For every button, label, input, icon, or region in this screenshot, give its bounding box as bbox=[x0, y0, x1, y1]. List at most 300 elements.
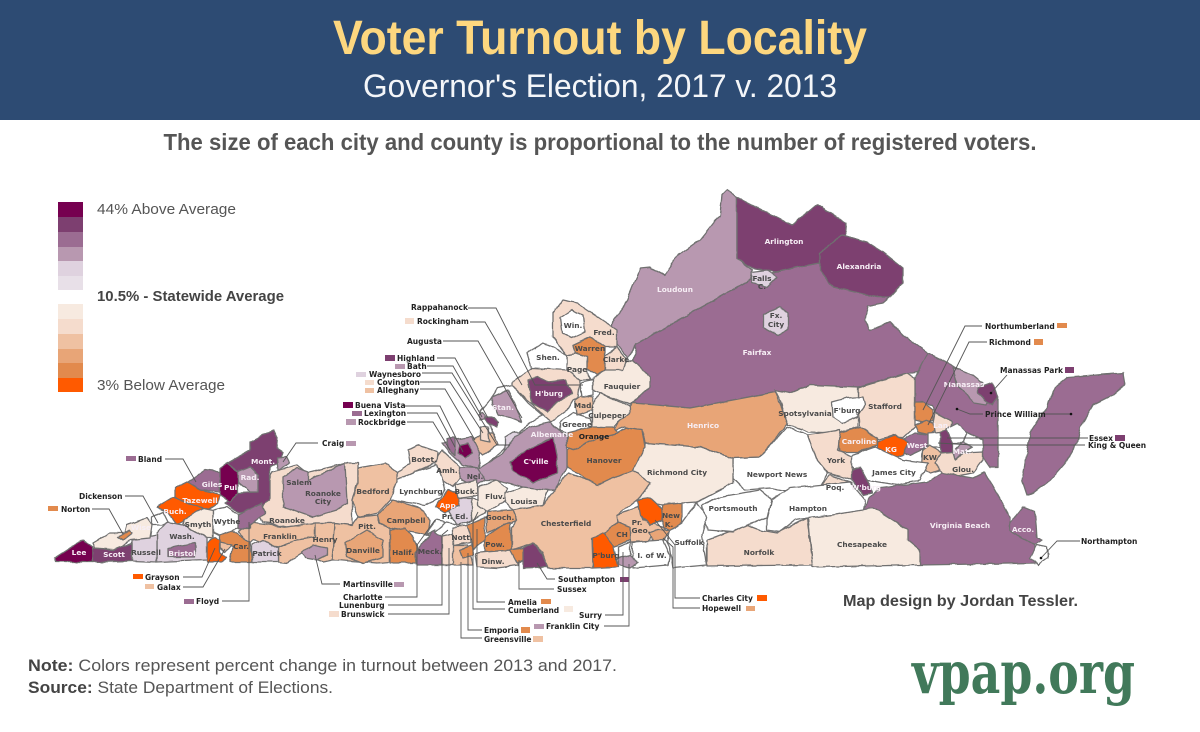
map: on-shape place labels: KW bbox=[923, 453, 937, 462]
county: Henry bbox=[278, 523, 335, 563]
map: on-shape place labels: I. of W. bbox=[637, 551, 667, 560]
callout: King & Queen: King & Queen bbox=[1088, 441, 1146, 450]
county: Dinwiddie bbox=[475, 550, 518, 568]
map: on-shape place labels: James City bbox=[871, 468, 916, 477]
map: on-shape place labels: H'burg bbox=[535, 389, 563, 398]
county: Wise bbox=[93, 518, 152, 550]
county: Middlesex bbox=[945, 423, 967, 443]
map: on-shape place labels: W'burg bbox=[851, 483, 881, 492]
county: Alexandria bbox=[820, 235, 903, 297]
map: on-shape place labels: City bbox=[315, 497, 331, 506]
county: Franklin bbox=[238, 522, 315, 547]
county: Mathews bbox=[953, 442, 973, 460]
map: on-shape place labels: Salem bbox=[286, 478, 312, 487]
county: Nottoway bbox=[453, 525, 472, 545]
callout: Greensville bbox=[461, 562, 543, 644]
map: on-shape place labels: Botet. bbox=[411, 455, 437, 464]
callout: Alleghany: Alleghany bbox=[377, 386, 419, 395]
map: on-shape place labels: Gooch. bbox=[486, 513, 515, 522]
callout: Floyd bbox=[184, 522, 249, 606]
county: Giles bbox=[188, 470, 220, 492]
callout: Norton: Norton bbox=[61, 505, 90, 514]
map: on-shape place labels: Lynchburg bbox=[399, 487, 443, 496]
header banner bbox=[0, 0, 1200, 120]
map: on-shape place labels: Geo. bbox=[632, 526, 651, 535]
county: Colonial Heights bbox=[605, 522, 630, 547]
map: on-shape place labels: Roanoke bbox=[269, 516, 305, 525]
map: on-shape place labels: Fx. bbox=[770, 311, 783, 320]
callout: Essex bbox=[947, 434, 1125, 443]
county: York bbox=[808, 430, 852, 480]
map: on-shape place labels: Henry bbox=[313, 535, 338, 544]
county: Louisa bbox=[505, 487, 548, 510]
county: James City bbox=[852, 447, 928, 485]
callout: Brunswick: Brunswick bbox=[341, 610, 386, 619]
county: Clarke bbox=[603, 347, 627, 370]
callout: Charlotte: Charlotte bbox=[343, 593, 383, 602]
map: callouts and leader lines bbox=[48, 303, 1146, 644]
map: on-shape place labels: Clarke bbox=[603, 355, 629, 364]
county: Virginia Beach bbox=[863, 472, 1037, 565]
callout: Sussex: Sussex bbox=[557, 585, 587, 594]
map: on-shape place labels: Danville bbox=[346, 546, 380, 555]
county: Augusta bbox=[478, 385, 542, 470]
callout: Bland: Bland bbox=[138, 455, 162, 464]
county: Russell bbox=[132, 535, 157, 562]
county: Rappahannock bbox=[580, 380, 593, 397]
county: Accomack bbox=[1010, 507, 1042, 545]
callout: Galax bbox=[145, 549, 225, 592]
county: Williamsburg bbox=[852, 467, 872, 495]
county: Rockingham bbox=[512, 368, 580, 422]
callout: Charles City: Charles City bbox=[702, 594, 753, 603]
callout: Southampton bbox=[537, 563, 629, 584]
map: on-shape place labels: Chesterfield bbox=[541, 519, 591, 528]
county: Prince George bbox=[617, 507, 667, 542]
map: on-shape place labels: Mat. bbox=[953, 447, 972, 456]
callout: Prince William bbox=[956, 408, 1072, 419]
callout: Lexington: Lexington bbox=[364, 409, 406, 418]
map: on-shape place labels: Pitt. bbox=[358, 522, 376, 531]
county: Carroll bbox=[220, 530, 252, 562]
map: on-shape place labels: F'burg bbox=[834, 406, 860, 415]
county: Cumberland bbox=[467, 497, 485, 523]
map: on-shape place labels: Pul. bbox=[224, 483, 240, 492]
county: Westmoreland bbox=[903, 433, 930, 455]
county: Patrick bbox=[252, 540, 278, 562]
county: Highland bbox=[485, 417, 498, 427]
county: Danville bbox=[345, 530, 383, 563]
county: Northumberland bbox=[915, 402, 933, 422]
county: Alleghany bbox=[473, 433, 498, 455]
county: Pulaski bbox=[220, 463, 238, 502]
county: Isle of Wight bbox=[632, 540, 670, 568]
map: on-shape place labels: Wythe bbox=[214, 517, 240, 526]
county: Manassas Park bbox=[978, 383, 998, 405]
county: Tazewell bbox=[175, 482, 220, 513]
callout: Norton bbox=[48, 505, 123, 534]
callout: Rappahannock: Rappahanock bbox=[411, 303, 469, 312]
county: Northampton bbox=[1030, 545, 1048, 565]
county: Scott bbox=[93, 543, 132, 562]
county: Staunton bbox=[492, 390, 522, 422]
callout: Lexington bbox=[352, 409, 455, 447]
callout: Lunenburg bbox=[339, 530, 448, 610]
map: on-shape place labels: Rad. bbox=[241, 473, 260, 482]
map: on-shape place labels: Halif. bbox=[392, 548, 414, 557]
county: Prince William west bbox=[915, 353, 998, 467]
map: on-shape place labels: Bedford bbox=[356, 487, 390, 496]
county: Appomattox bbox=[435, 490, 460, 513]
county: Prince William east bbox=[1022, 373, 1125, 495]
map: on-shape place labels: App. bbox=[439, 501, 459, 510]
logo: vpap.org: vpap.org bbox=[910, 639, 1135, 707]
map: on-shape place labels: Greene bbox=[562, 420, 592, 429]
callout: Bath: Bath bbox=[407, 362, 427, 371]
county: Salem and Roanoke City bbox=[283, 463, 347, 517]
county: Martinsville bbox=[302, 545, 327, 560]
county: Radford bbox=[238, 467, 258, 492]
callout: Bath bbox=[395, 362, 482, 417]
county: Poquoson bbox=[820, 475, 852, 495]
county: Southampton bbox=[523, 543, 548, 568]
county: Amelia bbox=[467, 517, 485, 550]
map: on-shape place labels: New bbox=[662, 511, 680, 520]
map: on-shape place labels: Page bbox=[567, 365, 587, 374]
county: Caroline bbox=[838, 427, 877, 452]
map: on-shape place labels: Tazewell bbox=[182, 496, 218, 505]
map: on-shape place labels: Glou. bbox=[952, 465, 974, 474]
callout: Greensville: Greensville bbox=[484, 635, 532, 644]
county: Portsmouth bbox=[702, 490, 772, 532]
map: on-shape place labels: Patrick bbox=[252, 549, 283, 558]
county: Fairfax City bbox=[763, 307, 788, 335]
county: Galax bbox=[220, 542, 232, 552]
county: Montgomery bbox=[225, 430, 283, 513]
map: on-shape place labels: Dinw. bbox=[481, 557, 505, 566]
map: on-shape place labels: Fauquier bbox=[604, 382, 641, 391]
map: on-shape place labels: Pow. bbox=[485, 540, 505, 549]
callout: Cumberland: Cumberland bbox=[508, 606, 559, 615]
title: Voter Turnout by Locality bbox=[333, 12, 867, 65]
callout: Richmond bbox=[928, 338, 1043, 425]
map: on-shape place labels: Car. bbox=[233, 542, 249, 551]
callout: Galax: Galax bbox=[157, 583, 181, 592]
county: King William bbox=[922, 445, 942, 473]
map: on-shape place labels: Spotsylvania bbox=[778, 409, 832, 418]
county: Stafford bbox=[858, 373, 915, 440]
map: on-shape place labels: Richmond City bbox=[647, 468, 707, 477]
map: on-shape place labels bbox=[72, 237, 1034, 566]
county: Craig bbox=[277, 457, 290, 470]
map: on-shape place labels: Albemarle bbox=[531, 430, 573, 439]
county: Lynchburg bbox=[390, 465, 445, 505]
callout: Richmond: Richmond bbox=[989, 338, 1031, 347]
county: Falls Church bbox=[751, 270, 777, 287]
map: on-shape place labels: Buch. bbox=[163, 507, 187, 516]
county: Essex bbox=[940, 430, 953, 453]
county: Petersburg bbox=[593, 533, 618, 568]
county: Goochland bbox=[487, 510, 517, 533]
callout: Dickenson bbox=[79, 492, 158, 523]
county: Hanover bbox=[567, 428, 645, 485]
county: Roanoke bbox=[257, 463, 358, 527]
county: Manassas bbox=[953, 367, 990, 405]
callout: Buena Vista bbox=[343, 401, 463, 452]
county: Madison bbox=[575, 395, 593, 415]
county: Grayson bbox=[207, 537, 227, 562]
county: Fairfax bbox=[633, 263, 928, 408]
county: Norfolk bbox=[707, 518, 813, 566]
note and source: Source: State Department of Elections. bbox=[28, 679, 333, 697]
callout: Martinsville: Martinsville bbox=[343, 580, 393, 589]
legend: 3% Below Average bbox=[97, 377, 225, 394]
callout: Alleghany bbox=[365, 386, 475, 440]
map: on-shape place labels: Franklin bbox=[263, 532, 297, 541]
county: King and Queen bbox=[928, 432, 940, 447]
map: on-shape place labels: KG bbox=[885, 445, 897, 454]
county: Covington bbox=[480, 427, 490, 442]
county: Prince Edward bbox=[447, 498, 472, 525]
map: on-shape place labels: Suffolk bbox=[674, 538, 705, 547]
county: Warren bbox=[573, 337, 605, 375]
county: Lexington bbox=[447, 438, 455, 455]
callout: Bland bbox=[126, 455, 196, 482]
county: Botetourt bbox=[397, 445, 438, 482]
map: on-shape place labels: Fairfax bbox=[743, 348, 772, 357]
map: on-shape place labels: Acco. bbox=[1012, 525, 1034, 534]
county: Washington bbox=[157, 522, 207, 562]
callout: Franklin City: Franklin City bbox=[546, 622, 599, 631]
callout: Covington bbox=[365, 378, 483, 433]
map: on-shape place labels: Loudoun bbox=[657, 285, 693, 294]
county: Emporia bbox=[460, 545, 473, 558]
map: on-shape place labels: Norfolk bbox=[744, 548, 775, 557]
callout: Craig bbox=[283, 439, 356, 462]
map: on-shape place labels: West bbox=[907, 441, 928, 450]
map: on-shape place labels: CH bbox=[616, 530, 628, 539]
callout: Augusta: Augusta bbox=[407, 337, 442, 346]
map: on-shape place labels: Chesapeake bbox=[837, 540, 887, 549]
map: on-shape place labels: Lan. bbox=[933, 421, 951, 430]
callout: Franklin City bbox=[534, 564, 629, 631]
callout: Waynesboro bbox=[356, 370, 510, 445]
map: on-shape place labels: York bbox=[826, 456, 846, 465]
county: Greensville bbox=[453, 545, 473, 565]
map: on-shape place labels: Louisa bbox=[511, 497, 537, 506]
map: on-shape place labels: Pr. Ed. bbox=[442, 512, 468, 521]
map: on-shape place labels: Win. bbox=[564, 321, 583, 330]
map: on-shape place labels: Smyth bbox=[185, 520, 211, 529]
callout: Surry bbox=[579, 552, 623, 620]
map: on-shape place labels: Nel. bbox=[467, 472, 483, 481]
map: on-shape place labels: Alexandria bbox=[837, 262, 881, 271]
map: on-shape place labels: P'burg bbox=[592, 551, 620, 560]
county: Bath bbox=[478, 412, 488, 420]
map: on-shape place labels: Stafford bbox=[868, 402, 902, 411]
callout: Manassas Park: Manassas Park bbox=[1000, 366, 1064, 375]
county: Charlotte bbox=[425, 520, 445, 537]
county: Newport News bbox=[733, 427, 828, 492]
county: Charlottesville bbox=[510, 438, 557, 483]
callout: Covington: Covington bbox=[377, 378, 420, 387]
callout: Emporia bbox=[468, 553, 530, 635]
map: on-shape place labels: Henrico bbox=[687, 421, 719, 430]
county: Winchester bbox=[560, 310, 585, 338]
county: Arlington bbox=[737, 197, 846, 272]
callout: Rockingham bbox=[405, 317, 522, 385]
map credit: Map design by Jordan Tessler. bbox=[843, 593, 1078, 610]
map: on-shape place labels: Hampton bbox=[789, 504, 827, 513]
map: on-shape place labels: Arlington bbox=[765, 237, 803, 246]
map: on-shape place labels: Shen. bbox=[536, 353, 560, 362]
callout: Manassas Park bbox=[990, 366, 1074, 394]
county: Rockbridge bbox=[442, 437, 480, 468]
callout: Waynesboro: Waynesboro bbox=[369, 370, 421, 379]
county: Gloucester bbox=[935, 452, 983, 478]
explanatory heading: The size of each city and county is proportional to the number of registered voters. bbox=[164, 129, 1036, 155]
callout: Rockbridge bbox=[346, 418, 450, 450]
map: on-shape place labels: C. bbox=[758, 282, 766, 291]
county: Fredericksburg bbox=[832, 397, 865, 423]
county: Suffolk bbox=[667, 502, 707, 568]
callout: Rappahannock bbox=[411, 303, 583, 385]
county: Lee bbox=[55, 540, 93, 562]
note and source bbox=[28, 657, 617, 697]
subtitle: Governor's Election, 2017 v. 2013 bbox=[363, 68, 837, 104]
county: Norton bbox=[118, 530, 132, 540]
callout: Dickenson: Dickenson bbox=[79, 492, 122, 501]
county: Wythe bbox=[213, 507, 238, 535]
map: on-shape place labels: Mont. bbox=[251, 457, 275, 466]
callout: Grayson bbox=[133, 548, 215, 582]
map: on-shape place labels: Wash. bbox=[169, 532, 195, 541]
map: on-shape place labels: Virginia Beach bbox=[930, 521, 990, 530]
county: Shenandoah bbox=[527, 343, 567, 372]
map: on-shape place labels: Bristol bbox=[168, 549, 196, 558]
county: Richmond bbox=[915, 420, 938, 435]
callout: Brunswick bbox=[329, 548, 449, 619]
county: Floyd bbox=[238, 503, 265, 529]
map: on-shape place labels: Buck. bbox=[454, 487, 478, 496]
callout: Charles City bbox=[655, 520, 767, 603]
county: Mecklenburg bbox=[415, 530, 442, 565]
callout: Northampton: Northampton bbox=[1081, 537, 1137, 546]
callout: Hopewell bbox=[663, 538, 755, 613]
county: Nelson bbox=[460, 467, 485, 487]
county: Henrico bbox=[612, 392, 788, 458]
callout: Southampton: Southampton bbox=[558, 575, 615, 584]
callout: Prince William: Prince William bbox=[985, 410, 1046, 419]
map: on-shape place labels: Giles bbox=[202, 480, 223, 489]
map: on-shape place labels: Portsmouth bbox=[709, 504, 757, 513]
map: on-shape place labels: Lee bbox=[72, 548, 86, 557]
map: on-shape place labels: Campbell bbox=[387, 516, 425, 525]
county: Charles City bbox=[637, 498, 663, 525]
callout: Northumberland bbox=[923, 322, 1067, 410]
county: New Kent bbox=[662, 503, 682, 530]
map: on-shape place labels: K. bbox=[665, 520, 673, 529]
county: Loudoun bbox=[610, 190, 752, 358]
county: Bristol bbox=[168, 543, 195, 557]
county: Lancaster bbox=[933, 413, 952, 433]
county: Halifax bbox=[390, 528, 417, 563]
legend: 44% Above Average bbox=[97, 201, 236, 218]
map: on-shape place labels: Pr. bbox=[632, 518, 643, 527]
county: Harrisonburg bbox=[528, 377, 572, 412]
callout: Emporia: Emporia bbox=[484, 626, 519, 635]
map: on-shape place labels: Russell bbox=[131, 548, 161, 557]
county: Hampton bbox=[767, 482, 865, 532]
callout: Buena Vista: Buena Vista bbox=[355, 401, 406, 410]
county: Culpeper bbox=[592, 393, 630, 427]
county: Chesterfield bbox=[512, 470, 650, 568]
county: Pittsylvania bbox=[332, 515, 390, 563]
callout: Hopewell: Hopewell bbox=[702, 604, 741, 613]
map: on-shape place labels: C'ville bbox=[523, 457, 549, 466]
county: Richmond City bbox=[633, 443, 733, 505]
county: Franklin City bbox=[618, 555, 638, 568]
map: on-shape place labels: Amh. bbox=[436, 466, 458, 475]
map: county and city shapes bbox=[55, 190, 1125, 568]
county: Waynesboro bbox=[505, 432, 528, 453]
county: Sussex bbox=[510, 548, 528, 563]
county: Amherst bbox=[435, 450, 460, 487]
callout: Cumberland bbox=[473, 512, 573, 615]
county: Fluvanna bbox=[478, 480, 507, 512]
map: on-shape place labels: Poq. bbox=[826, 483, 844, 492]
callout: Surry: Surry bbox=[579, 611, 602, 620]
map: on-shape place labels: Newport News bbox=[747, 470, 808, 479]
callout: Sussex bbox=[519, 560, 587, 594]
county: Fauquier bbox=[593, 360, 650, 405]
callout: Craig: Craig bbox=[322, 439, 344, 448]
callout: Highland: Highland bbox=[397, 354, 435, 363]
county: Campbell bbox=[378, 500, 430, 535]
map: on-shape place labels: City bbox=[768, 320, 784, 329]
county: Page bbox=[567, 353, 590, 380]
county: Frederick bbox=[553, 300, 617, 355]
callout: Floyd: Floyd bbox=[196, 597, 219, 606]
callout: Lunenburg: Lunenburg bbox=[339, 601, 385, 610]
county: Buchanan bbox=[157, 497, 203, 525]
county: Surry bbox=[618, 542, 630, 558]
callout: Amelia bbox=[477, 529, 551, 607]
county: Hopewell bbox=[649, 530, 670, 542]
callout: Martinsville bbox=[315, 555, 404, 589]
map: on-shape place labels: Hanover bbox=[586, 456, 622, 465]
map: on-shape place labels: Fred. bbox=[593, 328, 615, 337]
county: Powhatan bbox=[485, 522, 512, 552]
map: on-shape place labels: Caroline bbox=[842, 437, 876, 446]
county: Spotsylvania bbox=[775, 385, 858, 433]
callout: Augusta bbox=[407, 337, 522, 418]
legend bbox=[58, 201, 284, 394]
county: King George bbox=[877, 435, 908, 460]
county: Dickenson bbox=[152, 512, 168, 525]
callout: Highland bbox=[385, 354, 488, 418]
callout: Rockingham: Rockingham bbox=[417, 317, 469, 326]
map: on-shape place labels: Scott bbox=[103, 550, 125, 559]
callout: Grayson: Grayson bbox=[145, 573, 180, 582]
map: on-shape place labels: Nott. bbox=[451, 533, 473, 542]
map: on-shape place labels: Mad. bbox=[574, 401, 594, 410]
county: Buckingham bbox=[455, 480, 478, 498]
callout: Northumberland: Northumberland bbox=[985, 322, 1055, 331]
map: on-shape place labels: Wise bbox=[131, 523, 151, 532]
county: Greene bbox=[560, 413, 592, 433]
callout: Amelia: Amelia bbox=[508, 598, 537, 607]
